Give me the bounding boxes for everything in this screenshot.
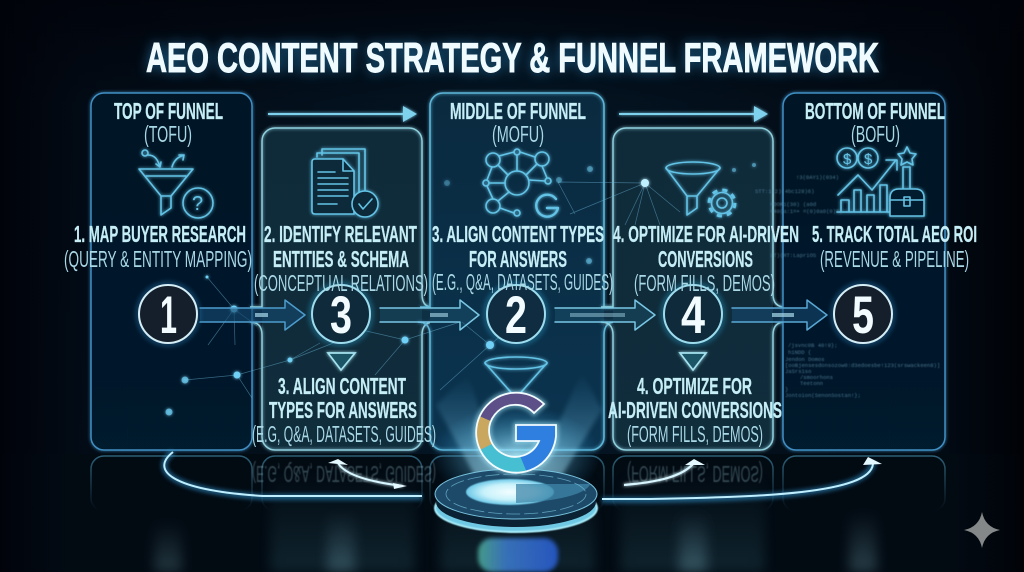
panel reflections <box>91 456 945 511</box>
reflective floor <box>0 454 1024 572</box>
icon: hologram funnel <box>485 357 547 398</box>
text block: align content lower <box>252 373 436 447</box>
arrow: step 3 to step 2 <box>380 300 479 330</box>
light beams <box>431 372 602 505</box>
text block: optimize lower: 4. OPTIMIZE FOR <box>637 373 752 399</box>
text block: map buyer research <box>64 221 252 272</box>
icon: funnel with gear <box>666 162 735 216</box>
text block: optimize: CONVERSIONS <box>658 246 753 272</box>
heading: BOFU <box>805 98 945 147</box>
step 3 badge: 3 <box>330 286 352 345</box>
code snippets: } <box>785 386 788 393</box>
text block: identify entities: 2. IDENTIFY RELEVANT <box>264 221 417 247</box>
step 3 badge <box>308 281 374 347</box>
text block: optimize: (FORM FILLS, DEMOS) <box>634 270 775 296</box>
icon: sparkle watermark <box>964 512 1000 548</box>
icon: revenue chart and chest: $ <box>843 151 852 168</box>
code snippets: !3(0AY1)(034) <box>796 174 839 181</box>
step 2 badge <box>483 281 549 347</box>
arrow: step 2 to step 4 <box>555 300 655 330</box>
text block: optimize lower <box>608 373 782 447</box>
step 2 badge: 2 <box>505 286 527 345</box>
step 5 badge <box>830 281 896 347</box>
step 4 badge <box>660 281 726 347</box>
reflected labels: (E.G, Q&A, DATASETS, GUIDES) <box>252 461 436 487</box>
text block: align content types <box>432 221 613 295</box>
arrow: step 1 to step 3 <box>200 300 305 330</box>
text block: identify entities: ENTITIES & SCHEMA <box>273 246 409 272</box>
sweep arrow: right long <box>602 457 882 500</box>
code snippets: /smoorhons <box>800 374 833 381</box>
sweep arrow: left short <box>328 459 407 489</box>
text block: identify entities <box>254 221 428 296</box>
text block: track ROI <box>812 221 977 272</box>
text block: map buyer research: (QUERY & ENTITY MAPPING) <box>64 246 252 272</box>
sweep arrow: left long <box>164 452 422 497</box>
code snippets: /jsvnc0B 40!9}; <box>788 342 838 349</box>
code snippets: JaSrs1so <box>785 368 811 375</box>
hologram: Google emblem on platform <box>431 357 602 532</box>
text block: optimize lower: (FORM FILLS, DEMOS) <box>627 421 763 447</box>
code snippets <box>755 174 940 399</box>
heading: BOFU: (BOFU) <box>851 121 900 147</box>
panel: optimize conversions <box>601 128 785 450</box>
step 1 badge: 1 <box>160 286 177 345</box>
code snippets: h1NDD { <box>788 349 811 356</box>
code snippets: STT:1(2)(4bc128)6) <box>755 188 814 195</box>
panel: middle of funnel <box>418 93 615 450</box>
panel: bottom of funnel <box>783 93 945 450</box>
text block: align content lower: 3. ALIGN CONTENT <box>278 373 406 399</box>
code snippets: =40(a:1=+ =(0)0a0(0)5) <box>770 208 843 215</box>
text block: align content lower: (E.G, Q&A, DATASETS, GUIDES) <box>252 421 436 447</box>
heading: MOFU <box>450 98 586 147</box>
icon: revenue chart and chest <box>837 147 924 216</box>
icon: funnel with question <box>139 150 213 218</box>
text block: optimize: 4. OPTIMIZE FOR AI-DRIVEN <box>613 221 799 247</box>
step 1 badge <box>135 281 201 347</box>
down marker: step 4 <box>680 353 706 370</box>
heading: TOFU <box>114 98 223 147</box>
panel: identify entities <box>250 128 434 450</box>
panel: top of funnel <box>91 93 252 450</box>
platform <box>435 469 597 532</box>
code snippets: (T)(RT:LapriOS <box>770 252 817 259</box>
down marker: step 3 <box>328 353 355 370</box>
heading: TOFU: TOP OF FUNNEL <box>114 98 223 124</box>
heading: MOFU: MIDDLE OF FUNNEL <box>450 98 586 124</box>
step 5 badge: 5 <box>852 286 874 345</box>
code snippets: [ooBjensesdonsozow0:d3edoesbe!123(srswackeen8)] <box>785 362 940 369</box>
code snippets: Jendon Domos <box>785 356 825 363</box>
flow arrows between steps <box>200 300 827 330</box>
reflected labels: (FORM FILLS, DEMOS) <box>627 461 763 487</box>
text block: identify entities: (CONCEPTUAL RELATIONS) <box>254 270 428 296</box>
text block: align content lower: TYPES FOR ANSWERS <box>269 397 417 423</box>
arrow: top left <box>268 106 417 122</box>
sweep arrow: right short <box>624 459 705 485</box>
heading: MOFU: (MOFU) <box>492 121 544 147</box>
icon: revenue chart and chest: $ <box>864 151 873 168</box>
reflected labels <box>252 461 763 487</box>
text block: optimize lower: AI-DRIVEN CONVERSIONS <box>608 397 782 423</box>
text block: align content types: (E.G., Q&A, DATASETS, GUIDES) <box>432 269 613 295</box>
code snippets: Jontoion(SenonSostan!}; <box>785 392 861 399</box>
arrow: top right <box>619 106 768 122</box>
step 4 badge: 4 <box>681 286 705 345</box>
text block: align content types: FOR ANSWERS <box>469 246 567 272</box>
heading: TOFU: (TOFU) <box>144 121 192 147</box>
text block: map buyer research: 1. MAP BUYER RESEARCH <box>74 221 246 247</box>
icon: Google G <box>470 386 562 480</box>
code snippets: =OOR1(30) (a0d <box>770 201 816 208</box>
icon: documents with check <box>312 149 378 217</box>
network lines and nodes <box>166 163 756 416</box>
text block: optimize <box>613 221 799 296</box>
icon: funnel with question: ? <box>192 193 203 215</box>
arrow: step 4 to step 5 <box>732 300 827 330</box>
text block: align content types: 3. ALIGN CONTENT TYPES <box>432 221 604 247</box>
icon: entity network with G <box>483 149 558 217</box>
code snippets: Teetonn <box>800 380 823 387</box>
